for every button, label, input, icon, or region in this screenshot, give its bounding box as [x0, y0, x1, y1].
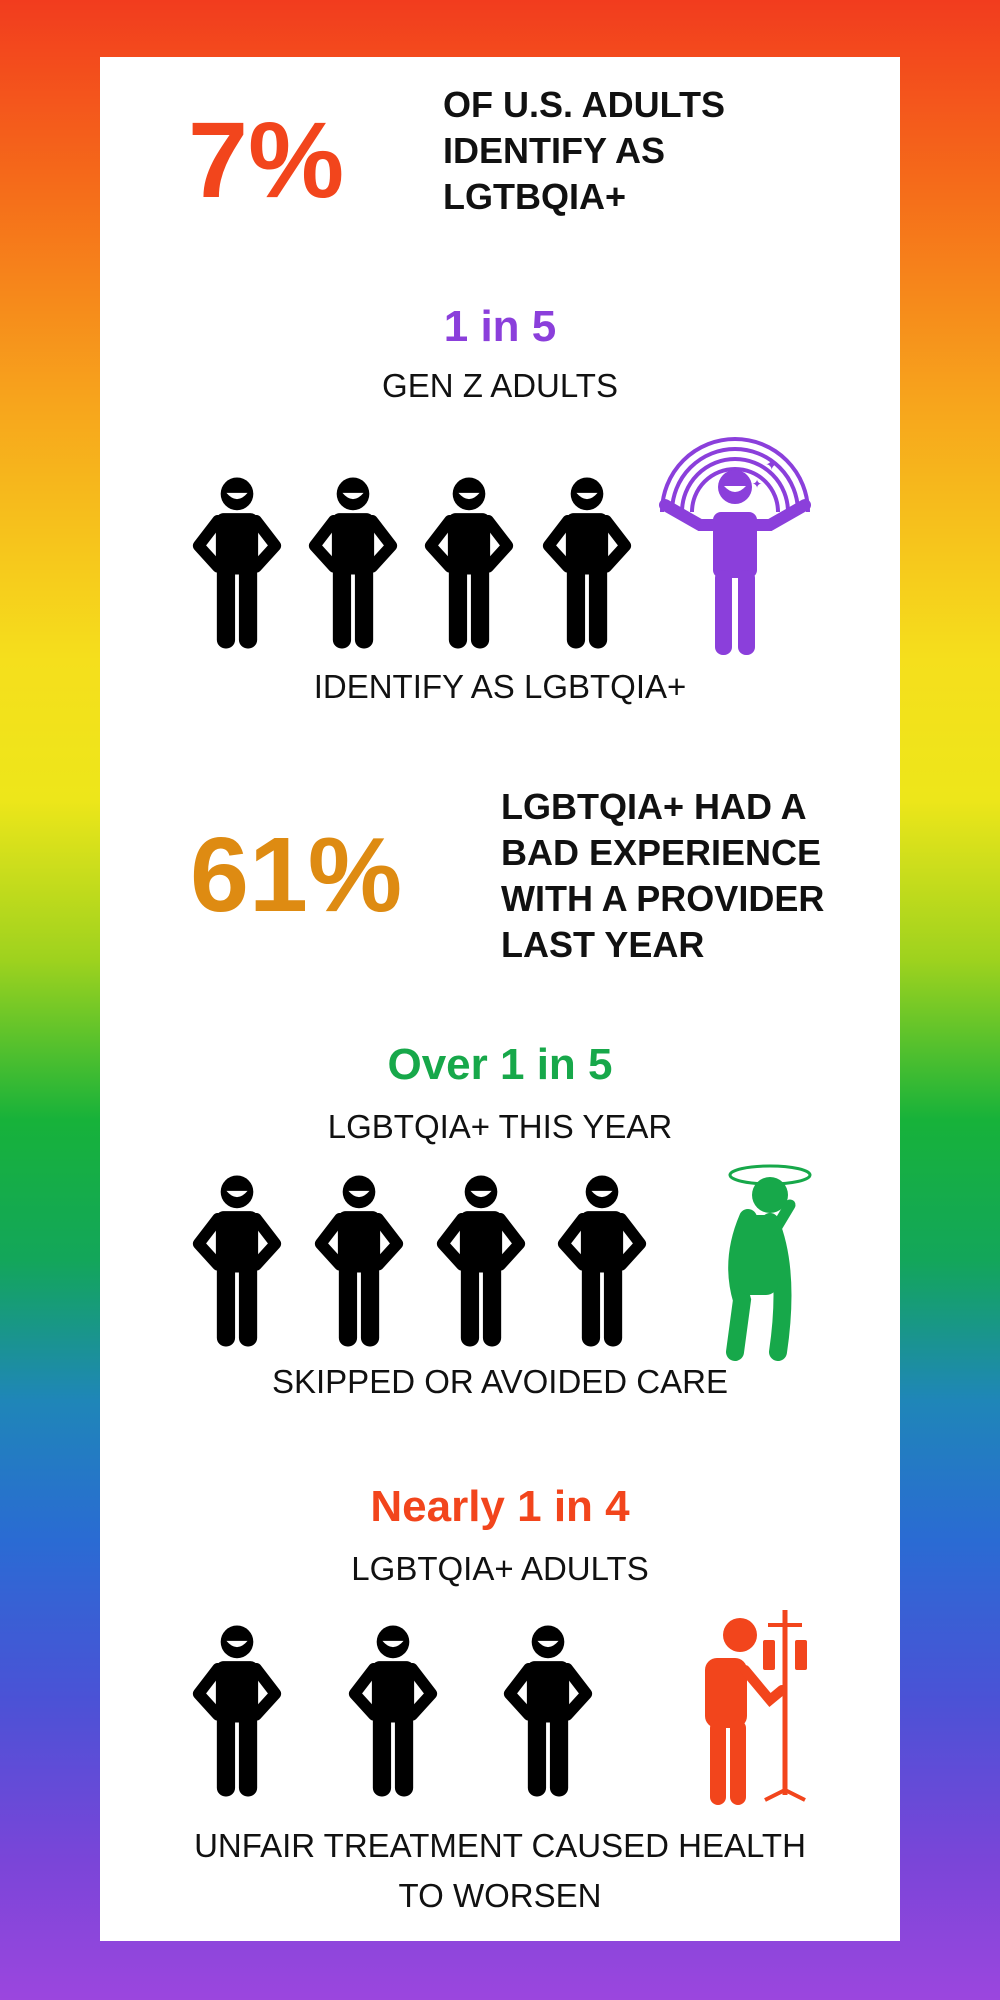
icon: purple rainbow figure: ✦ — [752, 477, 762, 491]
heading: over 1 in 5: Over 1 in 5 — [387, 1040, 612, 1089]
text: identify as: IDENTIFY AS LGBTQIA+ — [314, 668, 686, 705]
text: bad experience: BAD EXPERIENCE — [501, 832, 821, 873]
figures row 2 — [199, 1176, 640, 1346]
text: this year: LGBTQIA+ THIS YEAR — [328, 1108, 672, 1145]
text: of US adults — [443, 84, 725, 217]
text: unfair treatment: UNFAIR TREATMENT CAUSED HEALTH — [194, 1827, 806, 1864]
text: of US adults: IDENTIFY AS — [443, 130, 665, 171]
figures row 3 — [199, 1626, 586, 1796]
stat: 61%: 61% — [190, 816, 402, 934]
icon: orange IV figure — [705, 1610, 807, 1805]
heading: 1 in 5: 1 in 5 — [444, 302, 556, 351]
heading: nearly 1 in 4: Nearly 1 in 4 — [370, 1482, 630, 1531]
text: skipped: SKIPPED OR AVOIDED CARE — [272, 1363, 728, 1400]
icon: purple rainbow figure — [662, 439, 808, 655]
icon: purple rainbow figure: ✦ — [765, 457, 778, 474]
text: lgbtqia adults: LGBTQIA+ ADULTS — [351, 1550, 649, 1587]
text: of US adults: LGTBQIA+ — [443, 176, 626, 217]
text: bad experience: LGBTQIA+ HAD A — [501, 786, 807, 827]
text: of US adults: OF U.S. ADULTS — [443, 84, 725, 125]
text: unfair treatment: TO WORSEN — [399, 1877, 601, 1914]
figures row 1 — [199, 478, 625, 648]
text: bad experience: LAST YEAR — [501, 924, 704, 965]
text: bad experience: WITH A PROVIDER — [501, 878, 824, 919]
text: gen z adults: GEN Z ADULTS — [382, 367, 618, 404]
text: unfair treatment — [194, 1827, 806, 1914]
text: bad experience — [501, 786, 824, 965]
stat: 7%: 7% — [188, 99, 344, 220]
icon: green dizzy figure — [730, 1166, 810, 1352]
